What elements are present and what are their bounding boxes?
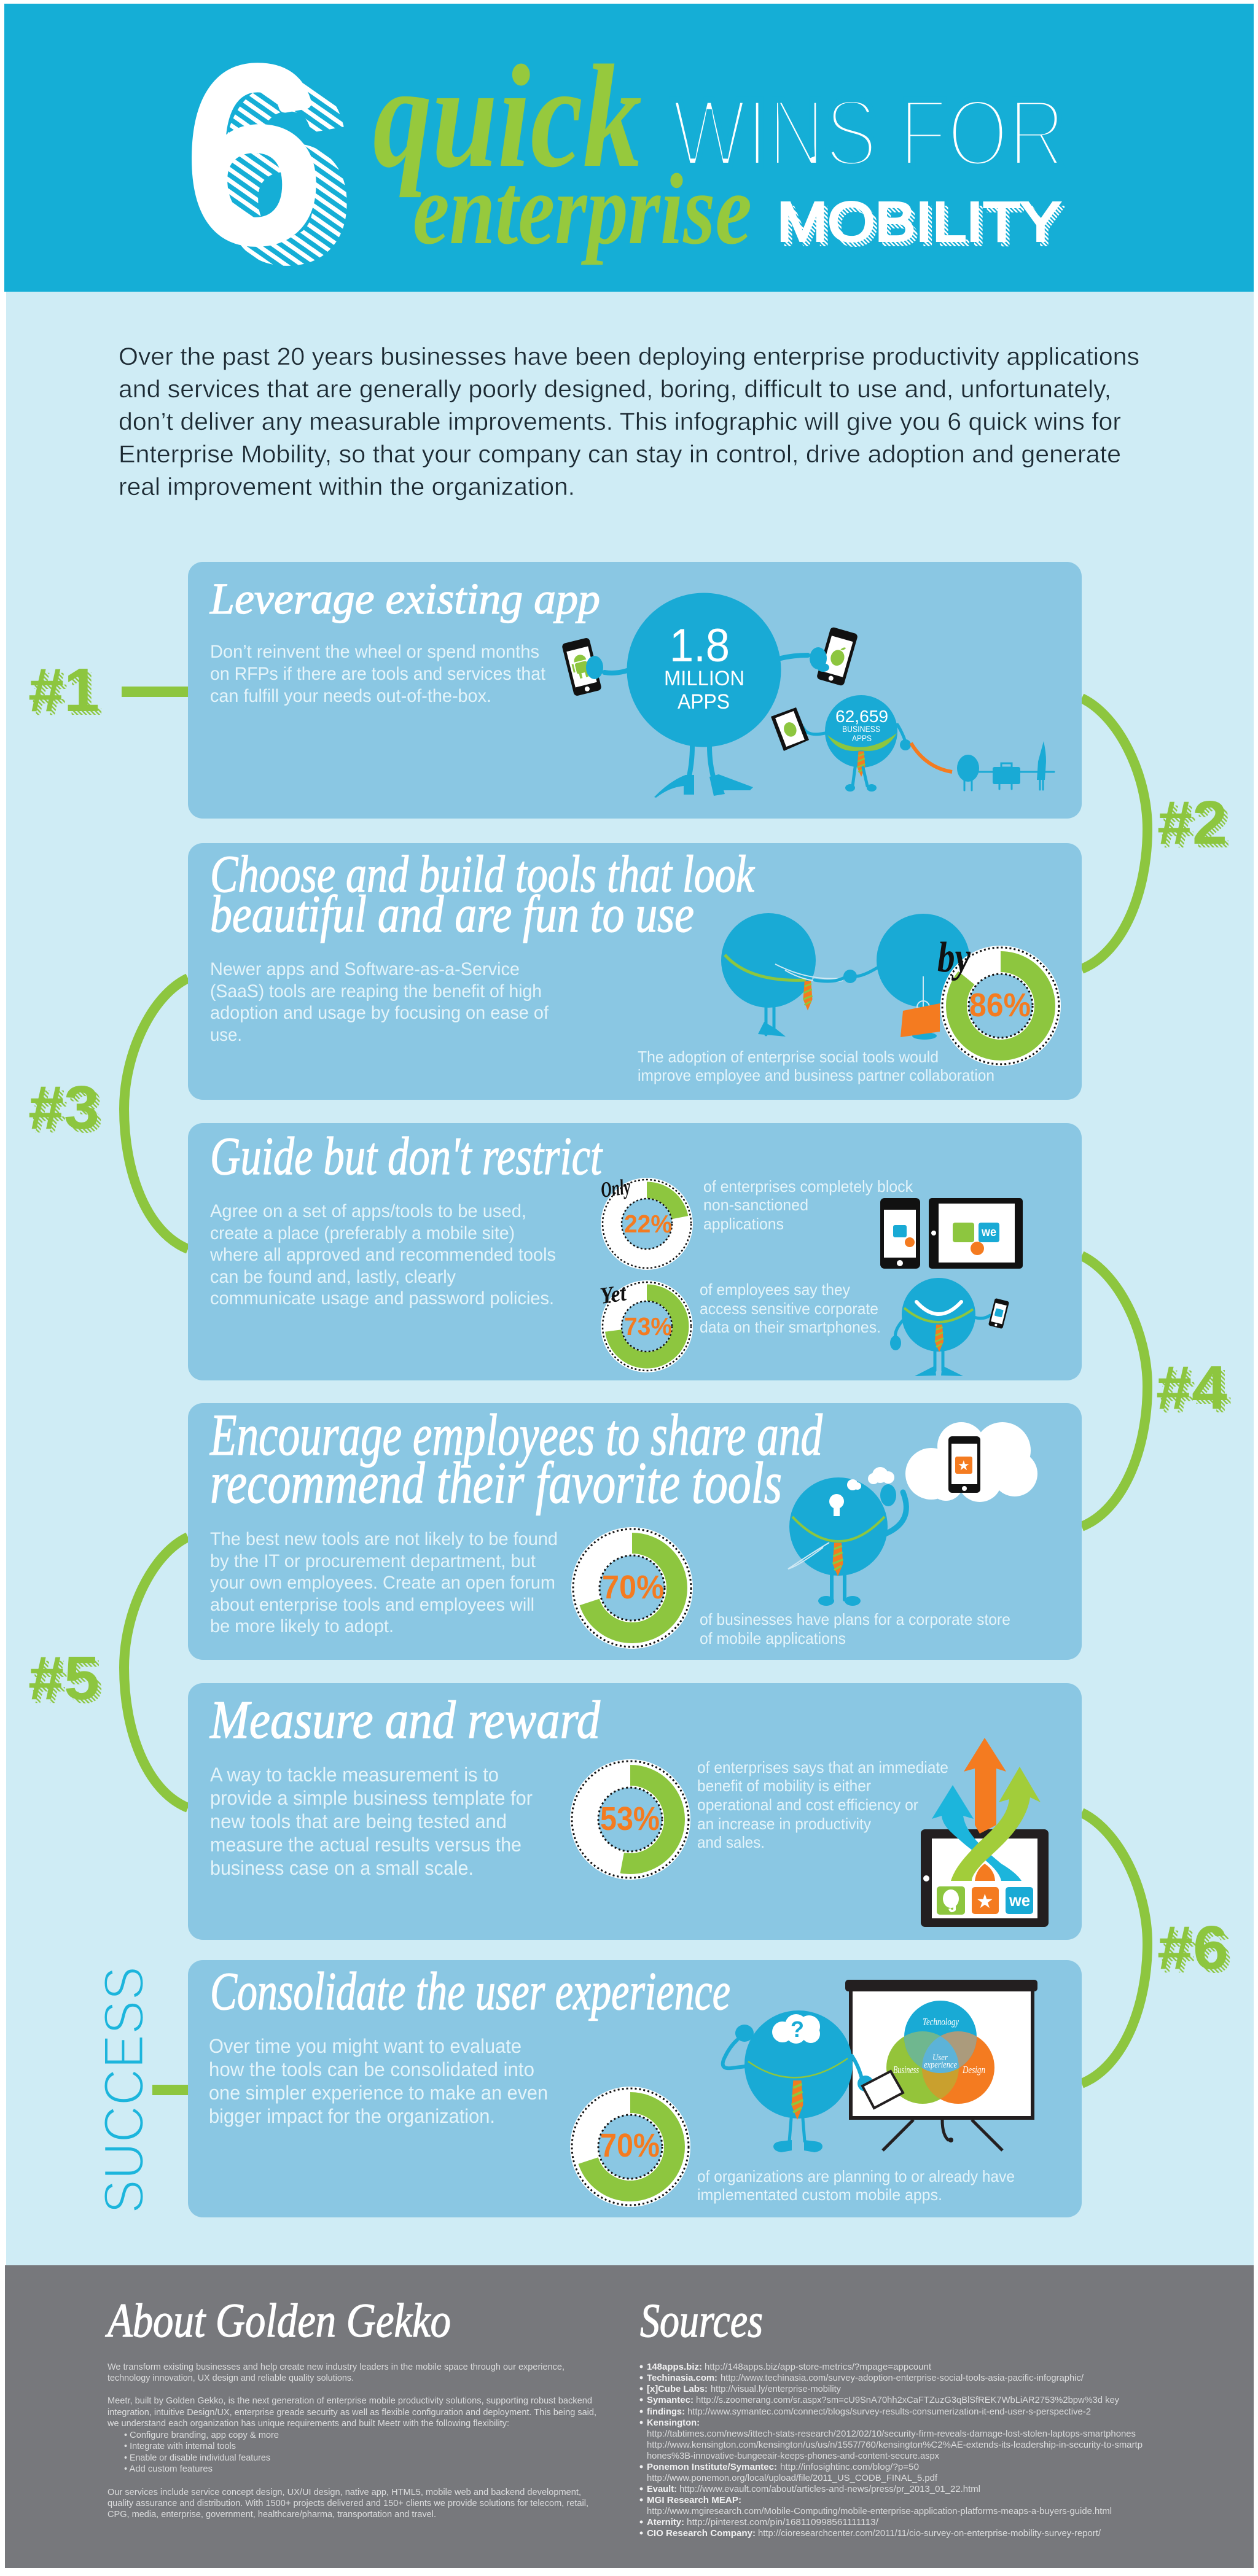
- body text: (SaaS) tools are reaping the benefit of high: [210, 981, 542, 1002]
- step label #6: #6: [1157, 1913, 1229, 1982]
- icon: tablet with arrows: ★: [976, 1889, 994, 1913]
- icon: locked phone: [880, 1198, 920, 1269]
- body text: on RFPs if there are tools and services that: [210, 664, 546, 684]
- character: big app creature: [604, 593, 808, 798]
- icon: tablet with apple: [771, 707, 809, 751]
- connector: curve 2 to 3: [124, 978, 188, 1249]
- stat text: and sales.: [697, 1833, 765, 1851]
- body text: can be found and, lastly, clearly: [210, 1267, 456, 1287]
- title word quick: quick: [373, 34, 642, 198]
- step label #4: #4: [1156, 1353, 1227, 1422]
- body text: about enterprise tools and employees will: [210, 1595, 534, 1615]
- about text: • Integrate with internal tools: [124, 2441, 236, 2451]
- about text: quality assurance and distribution. With 1500+ projects delivered and 150+ clients we provide solutions for telecom, retail,: [107, 2498, 588, 2508]
- intro paragraph: real improvement within the organization.: [119, 473, 575, 500]
- body text: A way to tackle measurement is to: [210, 1764, 499, 1786]
- about text: • Add custom features: [124, 2464, 213, 2474]
- sources list: http://www.symantec.com/connect/blogs/survey-results-consumerization-it-end-user-s-perspective-2: [687, 2407, 1091, 2417]
- body text: Don’t reinvent the wheel or spend months: [210, 642, 539, 662]
- heading: Guide but don't restrict: [210, 1127, 603, 1186]
- leash: [911, 743, 952, 772]
- character: thinking with light bulb: [788, 1477, 906, 1606]
- body text: measure the actual results versus the: [210, 1834, 522, 1856]
- body text: [210, 642, 546, 706]
- sources list: http://www.techinasia.com/survey-adoption-enterprise-social-tools-asia-pacific-infographic/: [721, 2373, 1084, 2383]
- venn chart: Technology: [923, 2016, 959, 2028]
- about text: • Enable or disable individual features: [124, 2453, 270, 2463]
- body text: create a place (preferably a mobile site): [210, 1223, 515, 1243]
- stat: 1.8 million apps: [664, 620, 744, 714]
- body text: [210, 1764, 533, 1879]
- connector: curve 4 to 5: [124, 1537, 188, 1808]
- caption: improve employee and business partner collaboration: [638, 1066, 994, 1084]
- stat text: smartphones: access sensitive corporate: [700, 1299, 878, 1318]
- icon: orange bag: [901, 1003, 940, 1037]
- donut: 73 percent: 73%: [624, 1312, 672, 1341]
- stat text: block applications: non-sanctioned: [703, 1196, 808, 1214]
- sources list: hones%3B-innovative-bungeeair-keeps-phones-and-content-secure.aspx: [647, 2451, 939, 2461]
- venn chart: experience: [924, 2060, 957, 2070]
- icon: tablet in hand: [862, 2071, 903, 2108]
- about text: we understand each organization has unique requirements and built Meetr with the following flexibility:: [107, 2418, 509, 2429]
- body text: communicate usage and password policies.: [210, 1288, 554, 1309]
- caption: implementated custom mobile apps.: [697, 2185, 942, 2204]
- arrow: green: [951, 1767, 1041, 1881]
- about text: CPG, media, enterprise, government, healthcare/pharma, transportation and travel.: [107, 2509, 436, 2520]
- body text: [209, 2035, 548, 2127]
- body text: [210, 959, 549, 1045]
- sources list: http://visual.ly/enterprise-mobility: [711, 2384, 841, 2394]
- body text: bigger impact for the organization.: [209, 2105, 495, 2127]
- venn chart: Design: [962, 2064, 985, 2076]
- character: smiling with phone: [890, 1278, 1009, 1376]
- body text: The best new tools are not likely to be found: [210, 1529, 558, 1549]
- stat: 62,659 business apps: 62,659: [835, 707, 888, 726]
- heading: [209, 1402, 823, 1516]
- sources list: Techinasia.com:: [647, 2373, 717, 2383]
- step label #2: #2: [1161, 792, 1231, 861]
- icon: phone with android: [561, 637, 602, 696]
- donut: 70 percent: [571, 1527, 693, 1649]
- sources list: http://www.kensington.com/kensington/us/us/n/1557/760/kensington%C2%AE-extends-its-leadership-in-security-to-smartp: [647, 2440, 1143, 2450]
- connector: success bar: [152, 2085, 188, 2095]
- step label #5: #5: [32, 1648, 103, 1716]
- stat text: of enterprises says that an immediate: [697, 1758, 948, 1776]
- caption: The adoption of enterprise social tools would: [638, 1048, 939, 1066]
- sources list: [640, 2362, 1143, 2539]
- intro paragraph: don’t deliver any measurable improvements. This infographic will give you 6 quick wins for: [119, 408, 1121, 435]
- body text: [210, 1529, 558, 1636]
- title numeral 6: 6: [216, 37, 351, 309]
- body text: your own employees. Create an open forum: [210, 1573, 555, 1593]
- heading: Leverage existing app: [209, 574, 600, 623]
- body text: new tools that are being tested and: [210, 1810, 507, 1832]
- body text: use.: [210, 1025, 242, 1045]
- icon: small phone: [988, 1298, 1009, 1329]
- body text: business case on a small scale.: [210, 1857, 474, 1879]
- icon: locked tablet: we: [981, 1226, 996, 1239]
- donut: 70 percent: 70%: [600, 2127, 660, 2164]
- heading: beautiful and are fun to use: [210, 884, 694, 943]
- stat text: smartphones: [700, 1280, 881, 1336]
- sources list: http://cioresearchcenter.com/2011/11/cio-survey-on-enterprise-mobility-survey-report/: [758, 2528, 1101, 2539]
- sources list: http://148apps.biz/app-store-metrics/?mpage=appcount: [705, 2362, 932, 2372]
- stat text: an increase in productivity: [697, 1815, 871, 1833]
- heading: [210, 844, 755, 943]
- body text: provide a simple business template for: [210, 1787, 533, 1809]
- script word yet: Yet: [598, 1280, 628, 1309]
- step label #1: #1: [28, 656, 100, 725]
- panel 1: leverage existing app: [188, 562, 1082, 819]
- about text: technology innovation, UX design and reliable quality solutions.: [107, 2373, 354, 2383]
- panel 5: measure and reward: [188, 1683, 1082, 1940]
- donut: 53 percent: 53%: [600, 1800, 660, 1837]
- sources list: http://s.zoomerang.com/sr.aspx?sm=cU9SnA70hh2xCaFTZuzG3qBlSfREK7WbLiAR2753%2bpw%3d key: [696, 2395, 1119, 2405]
- donut: 22 percent: [601, 1178, 693, 1270]
- tablet screen: [775, 711, 805, 747]
- sources list: http://tabtimes.com/news/ittech-stats-research/2012/02/10/security-firm-reveals-damage-lost-stolen-laptops-smartphones: [647, 2429, 1136, 2439]
- stat: 62,659 business apps: [835, 707, 888, 743]
- intro paragraph: [119, 343, 1139, 500]
- icon: tablet with arrows: [921, 1738, 1049, 1927]
- venn chart: [886, 2001, 994, 2104]
- about text: Our services include service concept design, UX/UI design, native app, HTML5, mobile web and backend development,: [107, 2487, 581, 2497]
- heading: Encourage employees to share and: [209, 1402, 823, 1468]
- panel 3: guide but don't restrict: [188, 1123, 1082, 1380]
- donut: 70 percent: [570, 2087, 690, 2207]
- step label #3: #3: [28, 1073, 100, 1142]
- icon: light bulb: [829, 1494, 844, 1516]
- step label #4: #4: [1160, 1357, 1231, 1426]
- heading: Consolidate the user experience: [210, 1962, 730, 2021]
- step label #3: #3: [32, 1077, 103, 1146]
- about text: We transform existing businesses and help create new industry leaders in the mobile space through our experience,: [107, 2362, 565, 2372]
- body text: [209, 1201, 556, 1309]
- sources list: http://www.mgiresearch.com/Mobile-Computing/mobile-enterprise-application-platforms-meaps-a-buyers-guide.html: [647, 2506, 1112, 2516]
- thought cloud with phone: ★: [958, 1458, 970, 1474]
- stat text: block applications: [703, 1177, 913, 1233]
- title words wins for: WINS FOR: [672, 80, 1065, 187]
- sources list: MGI Research MEAP:: [647, 2495, 741, 2505]
- connector: curve 5 to 6: [1082, 1813, 1147, 2084]
- heading: Measure and reward: [209, 1691, 601, 1750]
- icon: question cloud: ?: [791, 2017, 804, 2042]
- venn chart: User: [932, 2053, 948, 2063]
- header banner: [4, 4, 1254, 309]
- icon: phone with apple: [816, 626, 858, 687]
- stat text: benefit of mobility is either: [697, 1776, 871, 1795]
- sources heading: Sources: [640, 2294, 763, 2347]
- connector: curve 3 to 4: [1082, 1256, 1147, 1527]
- body text: where all approved and recommended tools: [209, 1245, 556, 1265]
- title word mobility: MOBILITY: [781, 196, 1065, 257]
- intro paragraph: Enterprise Mobility, so that your company can stay in control, drive adoption and generate: [119, 441, 1121, 468]
- sources list: http://infosightinc.com/blog/?p=50: [780, 2462, 919, 2472]
- heading: recommend their favorite tools: [210, 1450, 782, 1516]
- caption: of mobile applications: [700, 1629, 846, 1648]
- title word mobility: MOBILITY: [777, 192, 1061, 253]
- thought cloud with phone: [847, 1422, 1037, 1502]
- sources list: findings:: [647, 2407, 685, 2417]
- stat: 62,659 business apps: APPS: [852, 733, 872, 743]
- script word by: by: [937, 934, 971, 981]
- panel 4: encourage employees: [188, 1402, 1082, 1660]
- sources list: http://pinterest.com/pin/168110998561111113/: [687, 2517, 879, 2527]
- sources list: http://www.evault.com/about/articles-and-news/press/pr_2013_01_22.html: [679, 2484, 980, 2494]
- donut: 86 percent: [940, 946, 1061, 1066]
- step label #2: #2: [1157, 788, 1227, 857]
- caption: of businesses have plans for a corporate store: [700, 1610, 1010, 1628]
- sources list: [x]Cube Labs:: [647, 2384, 708, 2394]
- donut: 86 percent: 86%: [969, 987, 1031, 1024]
- presentation screen with venn diagram: [845, 1980, 1037, 2150]
- panel 2: choose and build tools: [188, 843, 1082, 1100]
- about text: [107, 2362, 596, 2520]
- icon: locked tablet: [929, 1198, 1023, 1269]
- footer band: [5, 2265, 1254, 2568]
- body text: one simpler experience to make an even: [209, 2082, 548, 2104]
- stat text: [697, 1758, 948, 1851]
- sources list: Evault:: [647, 2484, 677, 2494]
- connector: curve 1 to 2: [1082, 698, 1147, 969]
- body text: Over time you might want to evaluate: [209, 2035, 522, 2057]
- about text: • Configure branding, app copy & more: [124, 2430, 279, 2440]
- sources list: Ponemon Institute/Symantec:: [647, 2462, 777, 2472]
- character: business apps creature: [803, 695, 911, 792]
- step label #5: #5: [28, 1644, 100, 1713]
- characters shaking hands: [721, 913, 970, 1040]
- heading: Choose and build tools that look: [210, 844, 755, 903]
- character: questioning with tablet: [723, 2010, 903, 2152]
- stat: 62,659 business apps: BUSINESS: [842, 724, 880, 734]
- panel 6: consolidate the user experience: [188, 1960, 1082, 2217]
- page background: [6, 292, 1254, 2266]
- body text: can fulfill your needs out-of-the-box.: [210, 686, 491, 706]
- body text: how the tools can be consolidated into: [209, 2058, 534, 2080]
- about text: Meetr, built by Golden Gekko, is the next generation of enterprise mobile productivity solutions, supporting robust backend: [107, 2395, 592, 2406]
- arrow: blue: [932, 1785, 1022, 1881]
- script word only: Only: [600, 1174, 632, 1202]
- donut: 22 percent: 22%: [624, 1210, 672, 1238]
- step label #1: #1: [32, 660, 103, 728]
- hand: right: [810, 647, 829, 672]
- body text: by the IT or procurement department, but: [210, 1551, 536, 1571]
- stat text: block applications: applications: [703, 1215, 784, 1233]
- icon: tablet with arrows: we: [1009, 1891, 1030, 1910]
- stat: 1.8 million apps: MILLION: [664, 667, 744, 690]
- body text: be more likely to adopt.: [210, 1616, 394, 1636]
- stat text: smartphones: of employees say they: [700, 1280, 850, 1299]
- connector: step 1 bar: [122, 687, 188, 697]
- caption: of organizations are planning to or already have: [697, 2167, 1015, 2185]
- title numeral 6: 6: [186, 18, 321, 290]
- arrow: orange: [964, 1738, 1006, 1834]
- sources list: Kensington:: [647, 2418, 700, 2428]
- body text: Agree on a set of apps/tools to be used,: [210, 1201, 526, 1221]
- sources list: http://www.ponemon.org/local/upload/file/2011_US_CODB_FINAL_5.pdf: [647, 2473, 938, 2483]
- intro paragraph: and services that are generally poorly designed, boring, difficult to use and, unfortunately,: [119, 376, 1111, 403]
- stat: 1.8 million apps: APPS: [678, 690, 730, 714]
- hand: left: [586, 656, 603, 679]
- about text: integration, intuitive Design/UX, enterprise greade security as well as flexible configuration and deployment. This being said,: [107, 2407, 596, 2418]
- body text: adoption and usage by focusing on ease of: [210, 1003, 549, 1023]
- donut: 70 percent: 70%: [602, 1569, 664, 1606]
- mini figures: [957, 741, 1054, 790]
- caption: [697, 2167, 1015, 2204]
- donut: 73 percent: [601, 1280, 693, 1372]
- donut: 53 percent: [570, 1759, 690, 1880]
- stat text: operational and cost efficiency or: [697, 1796, 918, 1814]
- icon: question cloud: [772, 2014, 820, 2044]
- sources list: Aternity:: [647, 2517, 684, 2527]
- sources list: CIO Research Company:: [647, 2528, 756, 2539]
- caption: [700, 1610, 1010, 1648]
- stat text: block applications: of enterprises completely block: [703, 1177, 913, 1196]
- success label: SUCCESS: [93, 1966, 155, 2214]
- body text: Newer apps and Software-as-a-Service: [210, 959, 520, 979]
- stat text: smartphones: data on their smartphones.: [700, 1318, 881, 1336]
- about heading: About Golden Gekko: [105, 2294, 451, 2347]
- step label #6: #6: [1161, 1917, 1232, 1986]
- sources list: Symantec:: [647, 2395, 693, 2405]
- stat: 1.8 million apps: 1.8: [670, 620, 730, 672]
- title word enterprise: enterprise: [413, 153, 752, 265]
- sources list: 148apps.biz:: [647, 2362, 702, 2372]
- caption: [638, 1048, 994, 1084]
- venn chart: Business: [893, 2064, 919, 2076]
- intro paragraph: Over the past 20 years businesses have been deploying enterprise productivity applications: [119, 343, 1139, 370]
